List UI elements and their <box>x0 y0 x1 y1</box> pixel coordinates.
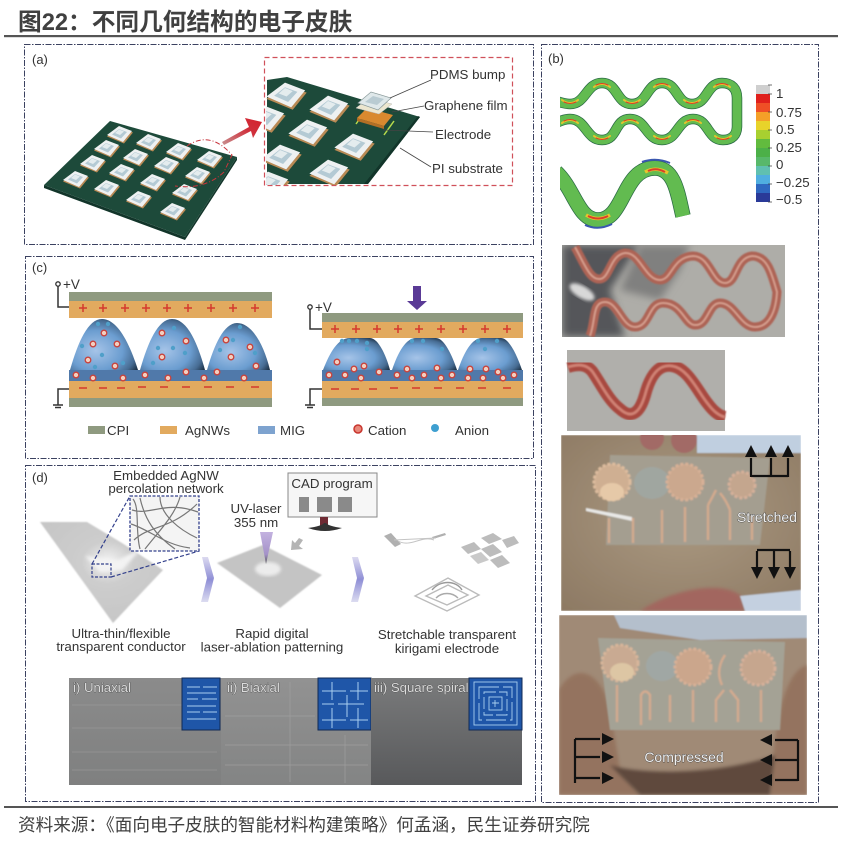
captions: transparent conductor <box>56 639 186 654</box>
label: graphene film: Graphene film <box>424 98 508 113</box>
purple press arrow <box>407 286 427 310</box>
panel c label: (c) <box>32 260 47 275</box>
legend: Anion <box>455 423 489 438</box>
caption: kirigami: kirigami electrode <box>395 641 499 656</box>
sensor board <box>44 121 237 240</box>
color bar: 1 <box>776 86 783 101</box>
panel a label: (a) <box>32 52 48 67</box>
micrograph: biaxial: ii) Biaxial <box>227 680 280 695</box>
left stack: +V <box>63 277 80 292</box>
photo: full serpentine <box>562 245 785 337</box>
photo: stretched device: Stretched <box>737 509 797 525</box>
CAD program <box>288 473 377 531</box>
captions: Ultra-thin/flexible <box>71 626 171 641</box>
caption: kirigami: Stretchable transparent <box>378 627 516 642</box>
AgNW inset <box>130 496 199 551</box>
photo: serpentine detail <box>567 350 725 431</box>
micrograph: uniaxial <box>69 678 221 785</box>
title: 图22：不同几何结构的电子皮肤 <box>18 9 353 36</box>
micrograph: square spiral <box>371 678 522 785</box>
kirigami samples <box>384 533 519 611</box>
CAD program: CAD program <box>291 476 373 491</box>
micrograph: biaxial <box>221 678 371 785</box>
zoom circle <box>175 140 232 187</box>
panel b label: (b) <box>548 51 564 66</box>
photo: stretched device <box>561 426 801 611</box>
chevron 2 <box>351 557 364 602</box>
right stack, compressed: +V <box>315 300 332 315</box>
source footnote: 资料来源：《面向电子皮肤的智能材料构建策略》何孟涵，民生证券研究院 <box>18 815 590 835</box>
photo: compressed device <box>559 615 807 795</box>
chevron 1 <box>201 557 214 602</box>
color bar: 0.25 <box>776 140 802 155</box>
legend: MIG <box>280 423 305 438</box>
color bar: −0.25 <box>776 175 810 190</box>
right stack, compressed <box>305 300 523 408</box>
panel c: ionic gel capacitive structure <box>26 256 534 458</box>
label: embedded network: percolation network <box>108 481 224 496</box>
label: UV laser: UV-laser <box>230 501 282 516</box>
caption: patterning <box>201 626 343 654</box>
caption: patterning: Rapid digital <box>235 626 309 641</box>
legend: AgNWs <box>185 423 230 438</box>
micrograph: square spiral: iii) Square spiral <box>374 680 469 695</box>
label: electrode: Electrode <box>435 127 491 142</box>
label: UV laser <box>230 501 282 530</box>
panel d label: (d) <box>32 470 48 485</box>
panel a: PDMS bump array <box>24 44 534 244</box>
simulated serpentine <box>556 83 737 228</box>
legend: Cation <box>368 423 406 438</box>
red arrow <box>222 118 262 145</box>
left stack <box>53 277 272 408</box>
panel b: serpentine stretchable circuits <box>542 44 818 802</box>
label: PI substrate: PI substrate <box>432 161 503 176</box>
legend <box>88 423 489 438</box>
photo: compressed device: Compressed <box>644 749 724 765</box>
caption: patterning: laser-ablation patterning <box>201 640 343 654</box>
captions <box>56 626 186 654</box>
label: embedded network: Embedded AgNW <box>113 468 219 483</box>
label: PDMS bump: PDMS bump <box>430 67 505 82</box>
label: embedded network <box>108 468 224 496</box>
label: UV laser: 355 nm <box>234 515 278 530</box>
conductor sheet <box>40 496 199 623</box>
small grey arrow <box>291 538 303 550</box>
color bar: 0.75 <box>776 105 802 120</box>
laser plate <box>217 532 322 608</box>
color bar: 0.5 <box>776 122 794 137</box>
micrograph: uniaxial: i) Uniaxial <box>73 680 131 695</box>
inset box <box>264 56 514 186</box>
color bar <box>756 85 810 207</box>
color bar: −0.5 <box>776 192 802 207</box>
panel d: kirigami electrode process <box>26 466 536 802</box>
exploded layers <box>356 92 394 135</box>
color bar: 0 <box>776 157 783 172</box>
legend: CPI <box>107 423 129 438</box>
caption: kirigami <box>378 627 516 656</box>
